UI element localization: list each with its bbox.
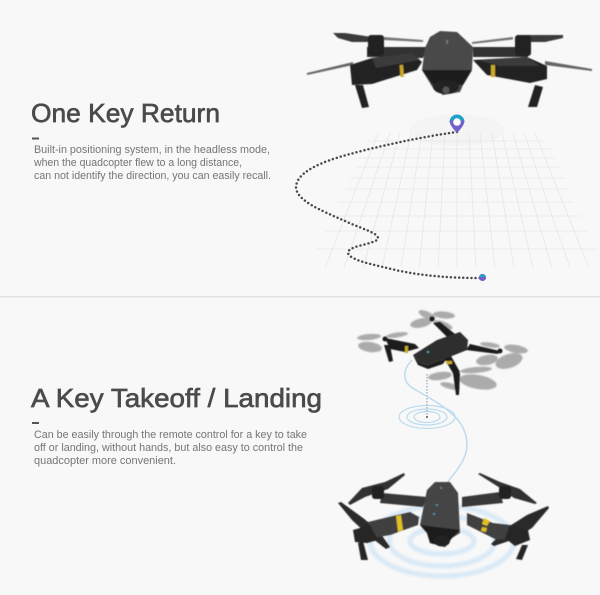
signal rings on ground [399, 374, 455, 428]
blue signal line [405, 360, 467, 483]
icon: location shadow [410, 114, 504, 146]
icon: folded drone front view [307, 31, 592, 108]
text block: positioning description: when the quadcopter flew to a long distance, [33, 157, 242, 169]
panel: key takeoff and landing [31, 308, 549, 576]
heading: a key takeoff / landing: A Key Takeoff / Landing [31, 383, 322, 413]
text block: takeoff description: quadcopter more convenient. [34, 455, 176, 467]
icon: path start dot [479, 274, 486, 281]
text block: takeoff description: Can be easily through the remote control for a key to take [34, 429, 307, 441]
landing waves under drone [370, 506, 514, 576]
heading dash [32, 422, 39, 424]
text block: takeoff description: off or landing, without hands, but also easy to control the [34, 442, 303, 454]
heading dash [32, 138, 39, 140]
icon: location pin [450, 115, 464, 133]
text block: positioning description: Built-in positioning system, in the headless mode, [34, 144, 270, 156]
panel: one key return [31, 31, 598, 281]
icon: drone hovering with spinning propellers [357, 308, 529, 395]
heading: one key return: One Key Return [31, 98, 220, 128]
chart: perspective map grid [316, 114, 598, 268]
text block: takeoff description [34, 429, 307, 467]
dotted flight path [296, 132, 480, 278]
icon: folded drone landing view [338, 473, 549, 560]
text block: positioning description: can not identify the direction, you can easily recall. [34, 170, 271, 182]
text block: positioning description [33, 144, 271, 182]
